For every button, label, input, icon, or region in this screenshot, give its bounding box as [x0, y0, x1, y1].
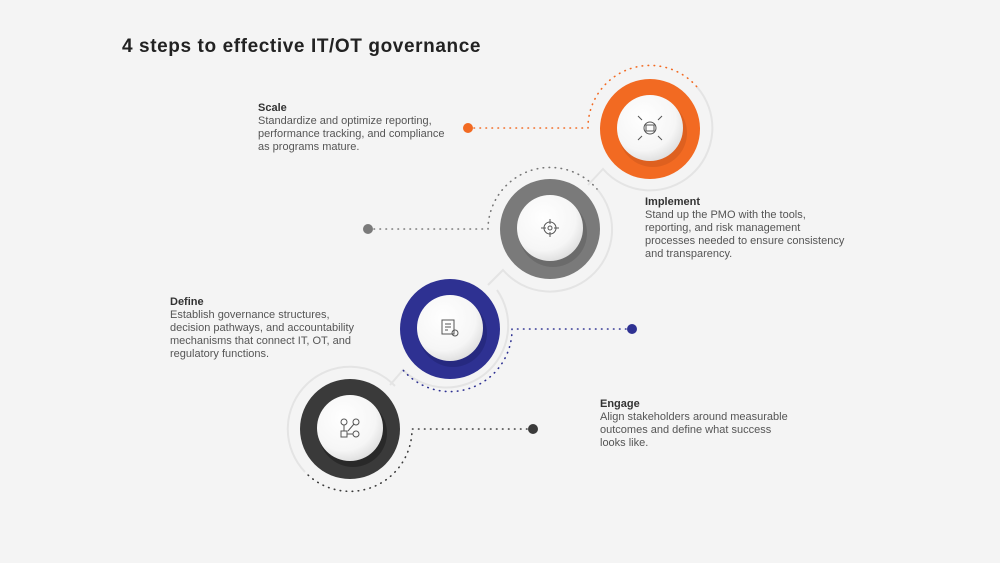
text: define: Define	[170, 296, 204, 308]
text: define: decision pathways, and accountability	[170, 322, 354, 334]
text: engage: Engage	[600, 398, 640, 410]
text: implement: processes needed to ensure consistency	[645, 235, 844, 247]
text: scale: as programs mature.	[258, 141, 359, 153]
icon: target	[541, 219, 559, 237]
text: define	[170, 296, 354, 360]
icon: document	[442, 320, 458, 336]
icon: network	[341, 419, 359, 437]
text: scale	[258, 102, 444, 153]
text: engage: looks like.	[600, 437, 648, 449]
text: engage: Align stakeholders around measurable	[600, 411, 788, 423]
connector rings	[288, 87, 712, 472]
text: engage	[600, 398, 788, 449]
text: scale: Scale	[258, 102, 287, 114]
text: define: Establish governance structures,	[170, 309, 330, 321]
step: engage	[300, 379, 538, 491]
text: implement: reporting, and risk management	[645, 222, 800, 234]
text: engage: outcomes and define what success	[600, 424, 771, 436]
text: implement	[645, 196, 844, 260]
icon: expand	[638, 116, 662, 140]
text: scale: Standardize and optimize reporting,	[258, 115, 432, 127]
step: scale	[463, 65, 700, 179]
text: define: regulatory functions.	[170, 348, 269, 360]
text: implement: and transparency.	[645, 248, 732, 260]
text: scale: performance tracking, and compliance	[258, 128, 444, 140]
step: implement	[363, 167, 600, 279]
title: 4 steps to effective IT/OT governance	[122, 36, 481, 57]
text: define: mechanisms that connect IT, OT, and	[170, 335, 351, 347]
step: define	[400, 279, 637, 392]
text: implement: Stand up the PMO with the tools,	[645, 209, 806, 221]
text: implement: Implement	[645, 196, 700, 208]
